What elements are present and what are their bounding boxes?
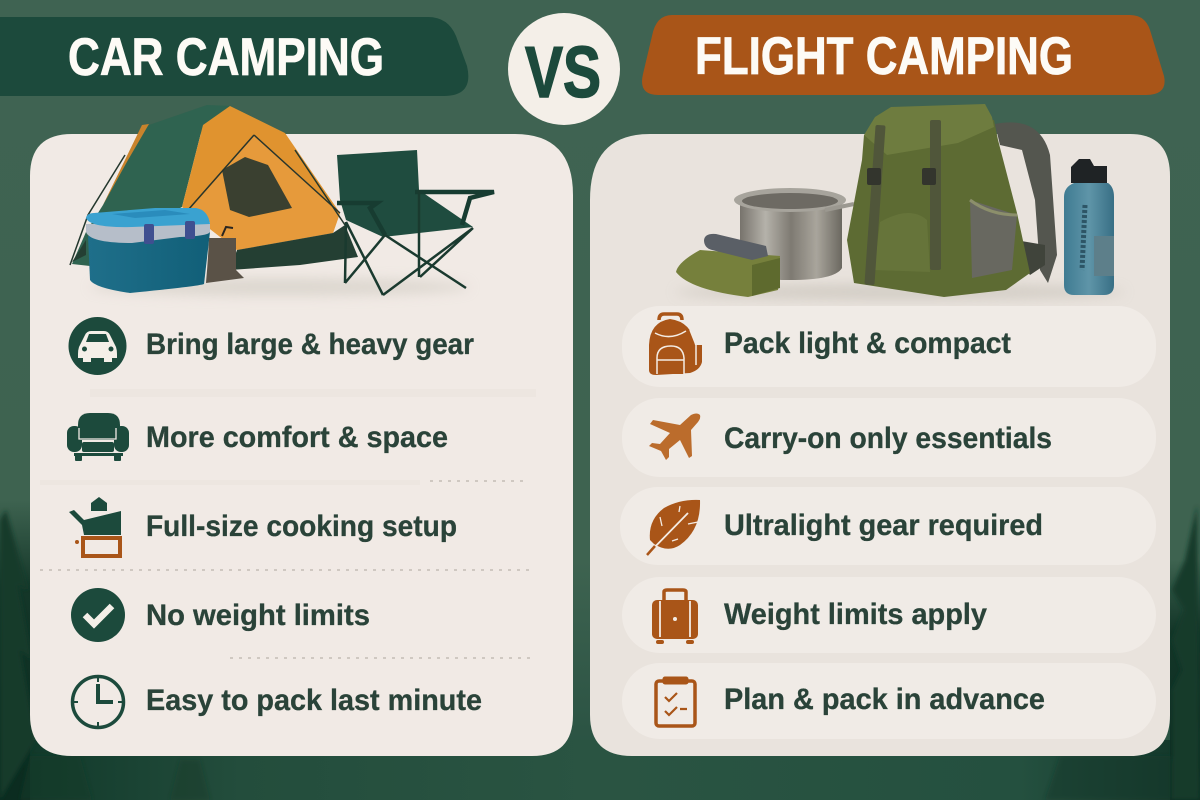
row: pack light: Pack light & compact xyxy=(724,327,1011,360)
row: comfort: More comfort & space xyxy=(146,421,448,454)
row: plan ahead xyxy=(622,663,1156,739)
icon: backpack xyxy=(649,314,702,375)
row: carry-on xyxy=(622,398,1156,477)
row: ultralight xyxy=(620,487,1156,565)
row dividers xyxy=(40,389,536,658)
row: easy packing: Easy to pack last minute xyxy=(146,684,482,717)
illustration: pot, backpack and bottle xyxy=(675,104,1125,300)
VS badge: VS xyxy=(525,33,601,113)
backpack xyxy=(847,104,1057,297)
cooler xyxy=(86,208,210,293)
VS badge xyxy=(508,13,620,125)
row: cooking xyxy=(69,497,457,556)
row: carry-on: Carry-on only essentials xyxy=(724,422,1052,455)
row: large gear xyxy=(68,317,474,375)
banner: car camping xyxy=(0,17,468,96)
row: large gear: Bring large & heavy gear xyxy=(146,328,474,361)
row: comfort xyxy=(67,413,448,461)
folded cloth xyxy=(676,250,780,297)
icon: cooking pot on stove xyxy=(69,497,121,556)
icon: clock xyxy=(72,676,124,728)
row: weight limits: Weight limits apply xyxy=(724,598,987,631)
icon: feather leaf xyxy=(647,500,700,555)
row: easy packing xyxy=(72,676,482,728)
row: weight limits xyxy=(622,577,1156,653)
water bottle xyxy=(1064,159,1114,295)
panel: flight camping xyxy=(590,104,1170,756)
row: no weight limits: No weight limits xyxy=(146,599,370,632)
stuff sack xyxy=(704,234,768,260)
title: car camping: CAR CAMPING xyxy=(68,28,384,87)
tent xyxy=(70,105,358,270)
banner: flight camping xyxy=(642,15,1165,95)
row: pack light xyxy=(622,306,1156,387)
icon: clipboard checklist xyxy=(656,677,695,726)
row: no weight limits xyxy=(71,588,370,642)
row: ultralight: Ultralight gear required xyxy=(724,509,1043,542)
icon: suitcase xyxy=(652,590,698,644)
list: car camping benefits xyxy=(40,317,536,728)
icon: check mark xyxy=(71,588,125,642)
icon: car xyxy=(68,317,126,375)
cooking pot xyxy=(734,188,854,280)
row: cooking: Full-size cooking setup xyxy=(146,510,457,543)
title: flight camping: FLIGHT CAMPING xyxy=(695,27,1073,86)
folding chair xyxy=(337,150,494,295)
icon: plane xyxy=(649,414,700,460)
illustration: tent, cooler and chair xyxy=(70,105,494,296)
list: flight camping requirements xyxy=(620,306,1156,739)
panel: car camping xyxy=(30,105,573,756)
lantern xyxy=(206,227,244,283)
icon: armchair xyxy=(67,413,129,461)
row: plan ahead: Plan & pack in advance xyxy=(724,683,1045,716)
